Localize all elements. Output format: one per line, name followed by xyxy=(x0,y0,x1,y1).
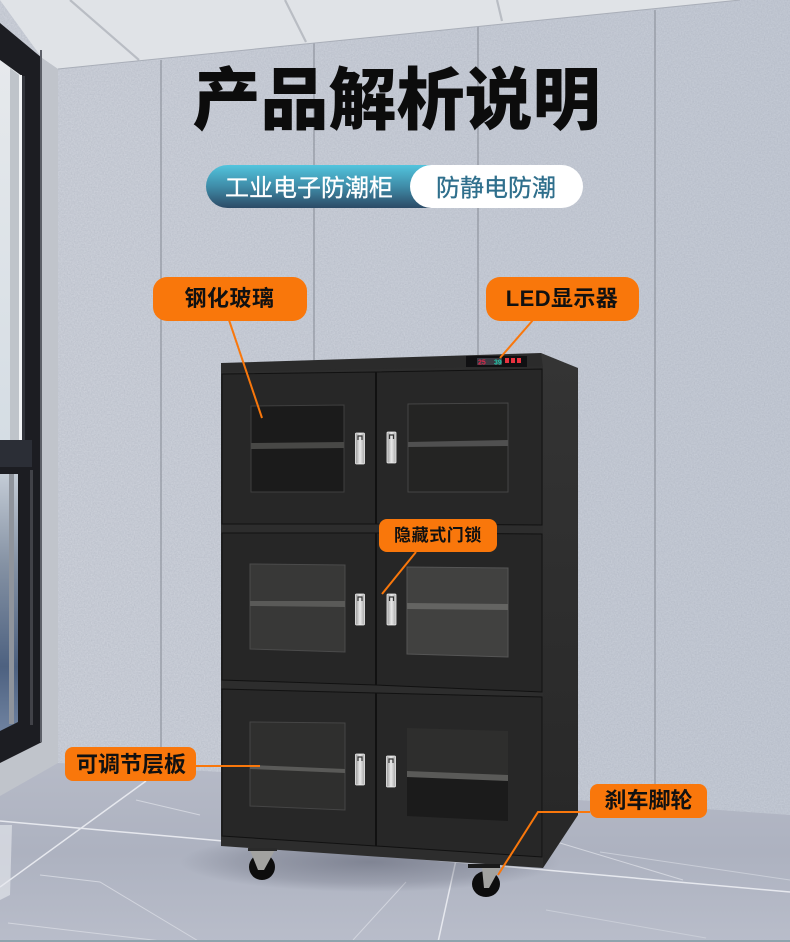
subtitle pill xyxy=(206,165,583,208)
cabinet top band xyxy=(221,353,543,374)
LED display: 25 xyxy=(478,360,486,366)
callout: brake caster: 刹车脚轮 xyxy=(604,788,693,813)
subtitle pill: 工业电子防潮柜 xyxy=(225,175,393,202)
title: 产品解析说明 xyxy=(192,63,601,139)
left caster xyxy=(248,848,277,880)
callout: hidden lock xyxy=(379,519,497,552)
cabinet xyxy=(221,353,578,897)
callout: tempered glass xyxy=(153,277,307,321)
leader lines xyxy=(196,320,590,875)
callout: tempered glass: 钢化玻璃 xyxy=(184,286,275,311)
casters xyxy=(248,848,500,897)
callout: LED display xyxy=(486,277,639,321)
door: top right xyxy=(376,369,542,525)
callout: adjustable shelf: 可调节层板 xyxy=(76,752,186,777)
door: bottom right xyxy=(376,693,542,857)
floor xyxy=(0,763,790,942)
window xyxy=(0,23,42,763)
left wall return xyxy=(0,58,58,797)
door handles xyxy=(356,432,396,787)
LED display: 39 xyxy=(494,360,502,366)
cabinet base xyxy=(221,366,543,868)
subtitle pill: 防静电防潮 xyxy=(436,175,556,202)
callout: LED display: LED显示器 xyxy=(506,286,618,311)
LED display xyxy=(466,356,527,367)
right caster xyxy=(468,864,500,897)
cabinet side xyxy=(541,353,578,868)
door: middle right xyxy=(376,533,542,692)
callout: hidden lock: 隐藏式门锁 xyxy=(394,526,482,545)
door: bottom left xyxy=(222,689,376,846)
door: top left xyxy=(222,372,376,524)
door: middle left xyxy=(222,533,376,685)
ceiling xyxy=(0,0,740,69)
floor shadow xyxy=(180,832,560,892)
callout: adjustable shelf xyxy=(65,747,196,781)
callout: brake caster xyxy=(590,784,707,818)
